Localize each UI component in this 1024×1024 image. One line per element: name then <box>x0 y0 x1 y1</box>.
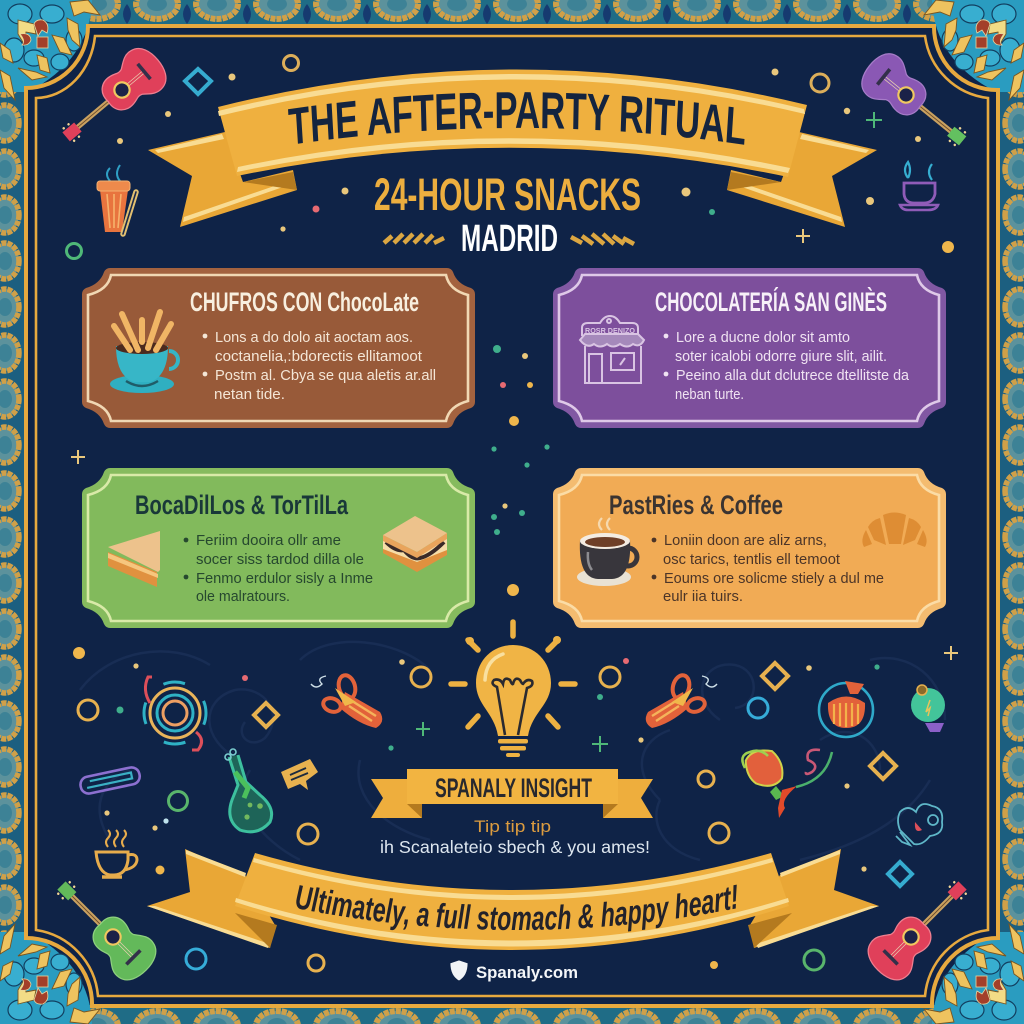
bullet list: ole malratours. <box>196 589 290 605</box>
guitar: red bottom-right <box>861 868 980 987</box>
bullet list: Lons a do dolo ait aoctam aos. <box>215 330 413 346</box>
icon: takeaway cup <box>97 165 136 234</box>
icon: coffee cup <box>577 518 637 586</box>
subtitle: 24-HOUR SNACKS <box>374 169 641 220</box>
icon: concentric rings <box>144 677 206 750</box>
bullet list: Postm al. Cbya se qua aletis ar.all <box>215 368 436 384</box>
bullet list: neban turte. <box>675 387 744 403</box>
icon: lightbulb <box>451 622 575 757</box>
title text: THE AFTER-PARTY RITUAL <box>288 92 744 145</box>
ring decorations <box>66 56 829 971</box>
panel: chocolateria san gines <box>553 268 946 428</box>
bullet list: coctanelia,:bdorectis ellitamoot <box>215 349 422 365</box>
tip heading: Tip tip tip <box>474 817 551 836</box>
bullet list <box>664 330 910 403</box>
insight heading: SPANALY INSIGHT <box>435 773 592 803</box>
closing ribbon <box>147 849 879 950</box>
icon: shield <box>450 960 468 981</box>
icon: outlined flower <box>896 804 942 845</box>
panel: pastries and coffee <box>553 468 946 628</box>
bullet list: Peeino alla dut dclutrece dtellitste da <box>676 368 910 384</box>
footer brand: Spanaly.com <box>476 963 578 982</box>
icon: purple coffee cup <box>900 162 938 210</box>
bullet list <box>203 330 436 403</box>
diamond decorations <box>185 69 912 886</box>
icon: shop <box>580 316 644 383</box>
icon: croissant <box>862 512 927 547</box>
icon: square sandwich <box>383 516 447 572</box>
icon: speech note <box>281 759 318 790</box>
faint background scrolls <box>80 642 945 860</box>
icon: green lightbulb <box>911 685 945 732</box>
icon: bottle <box>225 749 272 832</box>
title ribbon <box>148 69 877 227</box>
icon: churros cup <box>110 312 178 393</box>
tip text: ih Scanaleteio sbech & you ames! <box>380 837 650 857</box>
guitar: purple top-right <box>854 46 978 160</box>
rope ornaments <box>384 234 634 244</box>
bullet list: Eoums ore solicme stiely a dul me <box>664 571 884 587</box>
bullet list: socer siss tardod dilla ole <box>196 552 364 568</box>
panel: churros con chocolate <box>82 268 475 428</box>
panel heading: BocaDilLos & TorTilLa <box>135 490 349 520</box>
icon: orange castanets left <box>311 673 382 728</box>
bullet list <box>652 533 884 605</box>
icon: red kettle with hose <box>742 745 832 818</box>
guitar: red top-left <box>50 41 174 156</box>
panel heading: CHOCOLATERÍA SAN GINÈS <box>655 286 887 317</box>
guitar: green bottom-left <box>44 868 163 987</box>
bullet list: Lore a ducne dolor sit amto <box>676 330 850 346</box>
icon: shop: ROSR DENIZO <box>585 328 636 335</box>
bullet list: Fenmo erdulor sisly a Inme <box>196 571 373 587</box>
bullet list: netan tide. <box>214 387 285 403</box>
bullet list: soter icalobi odorre giure slit, ailit. <box>675 349 887 365</box>
insight ribbon <box>371 769 653 818</box>
location: MADRID <box>461 218 558 260</box>
panel heading: CHUFROS CON ChocoLate <box>190 287 419 317</box>
bullet list <box>184 533 373 605</box>
bullet list: Feriim dooira ollr ame <box>196 533 341 549</box>
icon: orange castanets right <box>646 673 717 728</box>
icon: paperclip <box>79 766 141 795</box>
footer brand <box>450 960 578 982</box>
icon: drum in ring <box>819 681 873 737</box>
icon: triangle sandwich <box>108 531 160 587</box>
closing text: Ultimately, a full stomach & happy heart! <box>296 884 737 932</box>
panel: bocadillos and tortilla <box>82 468 475 628</box>
icon: gold outline coffee cup <box>96 830 137 877</box>
bullet list: Loniin doon are aliz arns, <box>664 533 827 549</box>
dots and sparkles <box>71 68 958 969</box>
bullet list: osc tarics, tentlis ell temoot <box>663 552 840 568</box>
bullet list: eulr iia tuirs. <box>663 589 743 605</box>
panel heading: PastRies & Coffee <box>609 490 783 520</box>
